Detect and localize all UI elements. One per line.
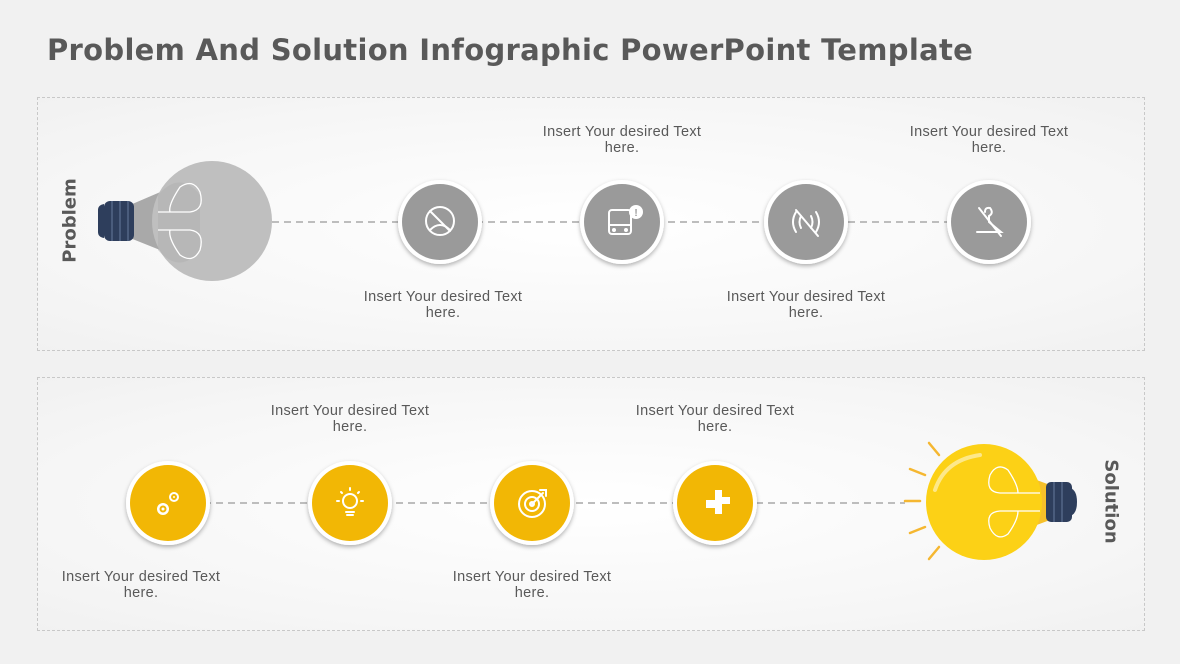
text: Insert Your desired Text here. xyxy=(453,569,611,601)
text: Insert Your desired Text here. xyxy=(364,289,522,321)
text: Insert Your desired Text here. xyxy=(727,289,885,321)
icon: yellow bulb xyxy=(905,443,1077,560)
label: Solution: Solution xyxy=(1100,459,1122,544)
text: Insert Your desired Text here. xyxy=(910,124,1068,156)
text: Insert Your desired Text here. xyxy=(62,569,220,601)
text: Insert Your desired Text here. xyxy=(271,403,429,435)
title: Problem And Solution Infographic PowerPoint Template xyxy=(47,33,973,67)
text: Insert Your desired Text here. xyxy=(636,403,794,435)
panel: problem xyxy=(37,97,1145,351)
solution icons xyxy=(157,490,730,515)
panel: solution xyxy=(37,377,1145,631)
problem icons xyxy=(426,207,1001,236)
icon: grey bulb xyxy=(98,161,272,281)
label: Problem: Problem xyxy=(60,178,80,263)
step circles xyxy=(126,180,1031,545)
text blocks: Insert Your desired Text here. xyxy=(543,124,701,156)
diagram graphics: ! xyxy=(634,208,638,219)
connector lines xyxy=(168,222,948,503)
